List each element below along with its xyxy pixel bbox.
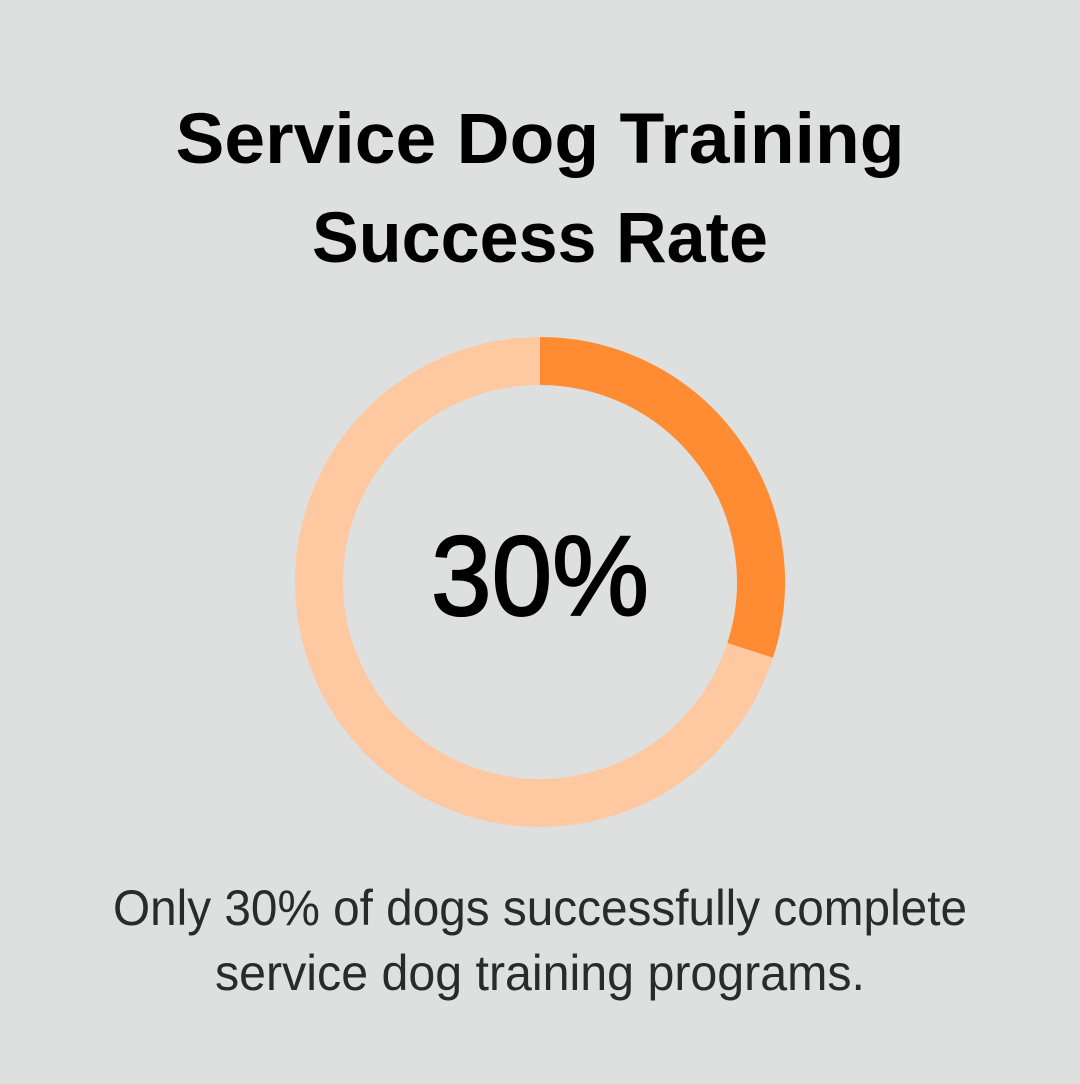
caption <box>113 880 967 1001</box>
title: Service Dog Training <box>176 100 905 179</box>
chart segment: 30% <box>540 361 761 650</box>
title: Success Rate <box>312 199 768 278</box>
chart track: remaining 70% <box>319 361 761 803</box>
caption: service dog training programs. <box>215 945 865 1001</box>
caption: Only 30% of dogs successfully complete <box>113 880 967 936</box>
donut chart: 30% success rate <box>319 361 761 803</box>
center value: 30% <box>431 513 649 639</box>
title <box>176 100 905 278</box>
